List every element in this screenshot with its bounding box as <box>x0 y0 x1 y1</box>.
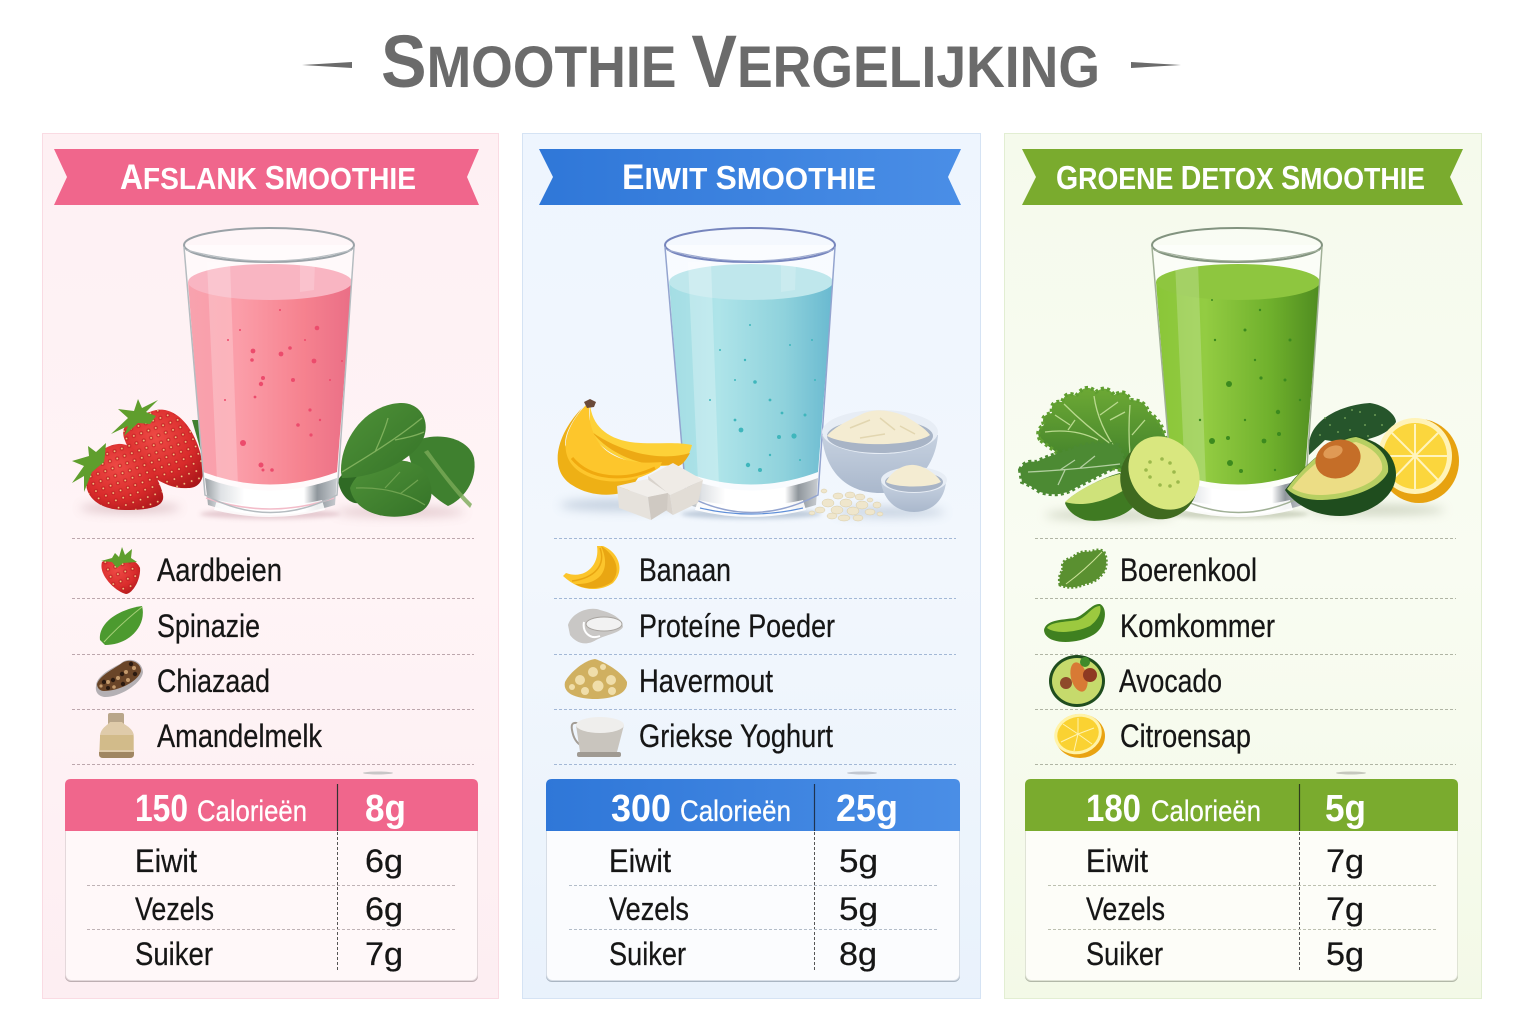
nutrition rows: Eiwit <box>1086 843 1148 879</box>
ingredient list <box>554 538 956 764</box>
strawberries <box>72 399 203 510</box>
icon: oats <box>565 659 627 699</box>
nutrition rows: 5g <box>1326 936 1364 972</box>
panel: Groene Detox Smoothie <box>1004 134 1482 998</box>
halved avocado <box>1285 433 1396 516</box>
tofu cubes <box>617 463 703 520</box>
calories header: 300 <box>611 788 671 830</box>
label: Proteïne Poeder: Proteíne Poeder <box>639 608 835 644</box>
label: Banaan: Banaan <box>639 552 731 588</box>
label: Havermout: Havermout <box>639 663 773 699</box>
icon: protein powder scoop <box>568 609 623 643</box>
nutrition rows: 6g <box>365 843 403 879</box>
nutrition rows: Vezels <box>609 891 689 927</box>
nutrition rows: Suiker <box>609 936 686 972</box>
cucumber <box>1065 422 1214 535</box>
nutrition rows: Eiwit <box>609 843 671 879</box>
nutrition rows: Suiker <box>1086 936 1163 972</box>
icon: strawberry <box>101 547 140 594</box>
nutrition table <box>546 772 960 982</box>
icon: Greek yoghurt cup <box>572 717 624 757</box>
panel: Eiwit Smoothie <box>522 134 980 998</box>
ribbon heading: Eiwit Smoothie: EIWIT SMOOTHIE <box>622 158 876 197</box>
illustration: bananas, tofu, oats and protein bowls with blue smoothie glass <box>558 228 947 521</box>
label: Boerenkool: Boerenkool <box>1120 552 1257 588</box>
lemon slice <box>1378 418 1459 503</box>
label: Aardbeien: Aardbeien <box>157 552 282 588</box>
nutrition rows: Suiker <box>135 936 213 972</box>
nutrition rows <box>609 843 878 972</box>
nutrition rows: 6g <box>365 891 403 927</box>
calories header: Calorieën <box>197 795 307 828</box>
ribbon heading: Eiwit Smoothie <box>539 149 961 205</box>
ribbon heading: Groene Detox Smoothie: GROENE DETOX SMOOTHIE <box>1056 159 1425 196</box>
calories header: 180 <box>1086 788 1141 830</box>
ingredient list <box>1035 538 1456 764</box>
icon: almond milk bottle <box>99 713 134 758</box>
ribbon heading: Groene Detox Smoothie <box>1022 149 1463 205</box>
nutrition rows: 7g <box>1326 843 1364 879</box>
icon: avocado <box>1049 655 1105 707</box>
calories header: 5g <box>1325 788 1366 830</box>
icon: kale leaf <box>1059 550 1106 587</box>
bananas <box>558 399 692 495</box>
panel: Afslank Smoothie <box>42 134 498 998</box>
label: Citroensap: Citroensap <box>1120 718 1251 754</box>
icon: cucumber <box>1044 604 1105 642</box>
nutrition rows: Vezels <box>1086 891 1165 927</box>
whole avocado <box>1309 403 1396 455</box>
pink smoothie glass <box>183 228 355 519</box>
nutrition rows: 8g <box>839 936 877 972</box>
calories header <box>135 788 406 830</box>
icon: chia seeds <box>96 660 143 697</box>
nutrition rows: Vezels <box>135 891 214 927</box>
nutrition rows: 7g <box>1326 891 1364 927</box>
nutrition rows <box>1086 843 1364 972</box>
green smoothie glass <box>1151 228 1323 519</box>
icon: lemon <box>1050 708 1106 760</box>
nutrition rows <box>135 843 403 972</box>
illustration: kale, cucumber, avocado and lemon with green smoothie glass <box>1020 228 1459 535</box>
calories header: 25g <box>836 788 898 830</box>
label: Komkommer: Komkommer <box>1120 608 1275 644</box>
label: Amandelmelk: Amandelmelk <box>157 718 323 754</box>
nutrition rows: Eiwit <box>135 843 197 879</box>
illustration: strawberries and spinach with pink smoothie glass <box>72 228 475 519</box>
ribbon heading: Afslank Smoothie: AFSLANK SMOOTHIE <box>120 158 416 197</box>
nutrition rows: 5g <box>839 843 878 879</box>
title text: SMOOTHIE VERGELIJKING <box>381 20 1100 103</box>
ribbon heading: Afslank Smoothie <box>54 149 479 205</box>
ingredient list <box>72 538 474 764</box>
calories header <box>1086 788 1366 830</box>
blue smoothie glass <box>664 228 836 519</box>
nutrition rows: 7g <box>365 936 403 972</box>
spinach leaves <box>338 403 475 517</box>
nutrition table <box>65 772 478 982</box>
calories header: Calorieën <box>1151 795 1261 828</box>
icon: spinach leaf <box>100 606 143 645</box>
calories header: Calorieën <box>680 795 791 828</box>
icon: banana <box>563 546 620 589</box>
label: Spinazie: Spinazie <box>157 608 260 644</box>
label: Chiazaad: Chiazaad <box>157 663 270 699</box>
kale leaves <box>1020 388 1168 494</box>
calories header: 8g <box>365 788 406 830</box>
label: Avocado: Avocado <box>1119 663 1222 699</box>
calories header <box>611 788 898 830</box>
protein powder bowl <box>822 410 938 493</box>
title <box>302 20 1181 103</box>
calories header: 150 <box>135 788 188 830</box>
label: Griekse Yoghurt: Griekse Yoghurt <box>639 718 833 754</box>
rolled oats <box>809 489 883 521</box>
small oat bowl <box>881 465 947 512</box>
nutrition rows: 5g <box>839 891 878 927</box>
nutrition table <box>1025 772 1458 982</box>
